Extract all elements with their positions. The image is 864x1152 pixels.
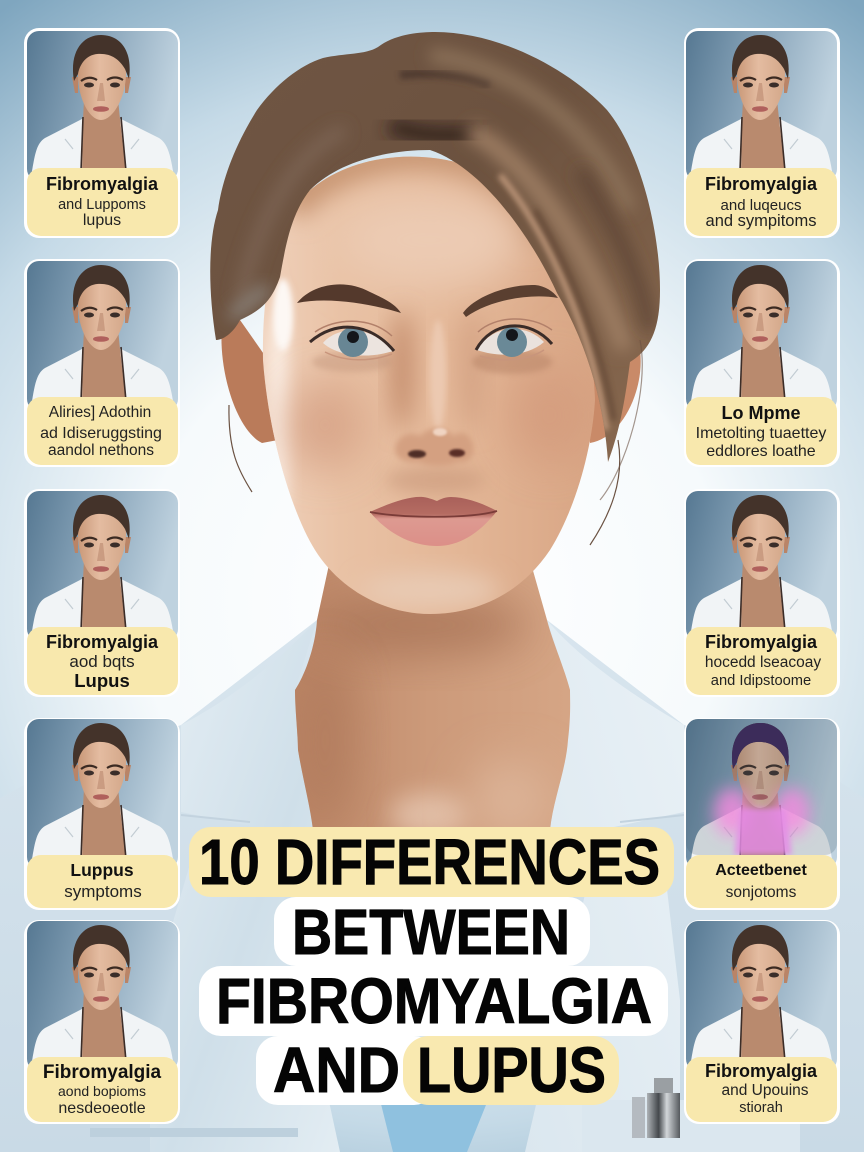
white lab coat — [0, 620, 864, 1152]
nose — [395, 428, 474, 466]
card: left 5: aond bopioms — [58, 1083, 146, 1099]
scrub top — [380, 1100, 488, 1152]
card: right 3: Fibromyalgia — [705, 632, 818, 652]
card: right 2: Imetolting tuaettey — [696, 425, 826, 442]
card: right 2 — [684, 259, 840, 467]
right eyebrow — [463, 285, 558, 317]
card: left 2 — [24, 259, 180, 467]
card: left 3 — [24, 489, 180, 697]
card: right 3: hocedd lseacoay — [705, 654, 821, 671]
card: right 5: stiorah — [739, 1100, 783, 1116]
card: right 1 — [684, 28, 840, 238]
card: right 2: eddlores loathe — [706, 443, 816, 460]
title: FIBROMYALGIA — [216, 965, 652, 1037]
right eye — [476, 319, 552, 360]
card: left 1: and Luppoms — [58, 197, 146, 213]
card: right 1: Fibromyalgia — [705, 174, 818, 194]
ears — [221, 320, 278, 443]
neck and chest — [295, 568, 570, 827]
title: AND — [273, 1034, 400, 1106]
card: right 4 with pink inflammation glow — [684, 718, 840, 910]
card: right 4 with pink inflammation glow: sonjotoms — [726, 884, 797, 901]
card: left 4: Luppus — [70, 860, 134, 880]
card: left 1: lupus — [83, 212, 121, 229]
card: left 5: Fibromyalgia — [43, 1062, 162, 1083]
card: left 3: Lupus — [74, 670, 130, 691]
card: right 5: Fibromyalgia — [705, 1061, 818, 1081]
face — [255, 140, 600, 620]
card: right 2: Lo Mpme — [722, 403, 800, 423]
card: right 1: and luqeucs — [721, 197, 801, 214]
card: left 4: symptoms — [64, 882, 142, 901]
card: left 2: aandol nethons — [48, 442, 154, 459]
title — [189, 826, 674, 1106]
card: right 3 — [684, 489, 840, 697]
card: left 2: ad Idiseruggsting — [40, 425, 162, 442]
card: left 3: Fibromyalgia — [46, 632, 159, 652]
card: left 1 — [24, 28, 180, 238]
title: LUPUS — [417, 1034, 606, 1106]
lips — [370, 497, 497, 546]
card: right 4 with pink inflammation glow: Acteetbenet — [715, 862, 807, 879]
card: left 1: Fibromyalgia — [46, 174, 159, 194]
card: left 4 — [24, 718, 180, 910]
title: 10 DIFFERENCES — [199, 826, 660, 898]
card: right 3: and Idipstoome — [711, 673, 811, 689]
loose hair strands — [229, 340, 642, 545]
card: left 5: nesdeoeotle — [58, 1100, 146, 1117]
left eye — [310, 321, 394, 360]
card: left 5 — [24, 920, 180, 1124]
title: BETWEEN — [292, 896, 570, 968]
hair — [210, 32, 660, 462]
card: right 5: and Upouins — [721, 1082, 809, 1099]
pen in pocket — [632, 1078, 680, 1138]
card: left 2: Aliries] Adothin — [49, 404, 151, 421]
card: right 1: and sympitoms — [706, 212, 816, 230]
left eyebrow — [297, 284, 401, 313]
card: right 5 — [684, 920, 840, 1124]
card: left 3: aod bqts — [69, 652, 135, 671]
